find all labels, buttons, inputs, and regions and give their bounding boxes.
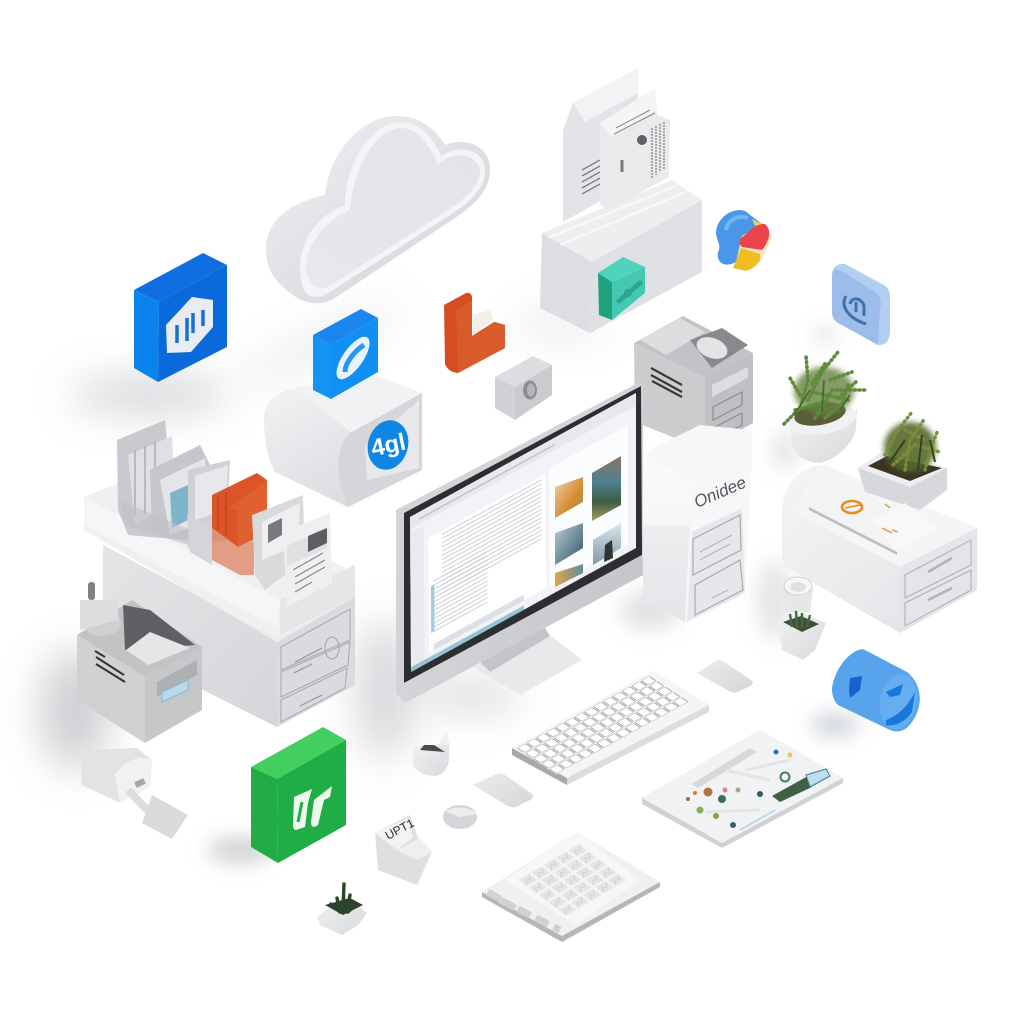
- blue square icon: [134, 253, 227, 382]
- orange folders: [212, 473, 267, 575]
- papers on right cabinet: [809, 485, 937, 555]
- documents on white box: [540, 68, 702, 333]
- box base: [540, 180, 702, 333]
- tablet: [642, 730, 843, 848]
- small plant and cup: [777, 577, 826, 660]
- back document: [563, 68, 638, 222]
- icon: orange bracket: [444, 293, 505, 373]
- monitor: [396, 383, 643, 703]
- keyboard: [512, 671, 709, 785]
- desk mouse round: [443, 805, 477, 829]
- monitor stand: [473, 628, 582, 695]
- blue roll icon: [832, 649, 920, 731]
- plant in white pot, top: [784, 352, 866, 463]
- small white cup: [413, 731, 450, 776]
- white box with blue badge: [264, 372, 422, 507]
- soft ground shadows: [40, 291, 860, 862]
- icon: colourful ring: [716, 210, 772, 271]
- printer left: [77, 582, 202, 743]
- teal icon on box: [598, 257, 645, 320]
- front pages: [252, 495, 332, 607]
- icon: light blue tile: [832, 264, 890, 345]
- printer top right: [634, 316, 753, 450]
- card: [142, 795, 188, 839]
- gray documents: [117, 420, 230, 565]
- icon: gray block: [495, 356, 552, 420]
- tower with label: [643, 425, 752, 622]
- pen holder: [375, 815, 432, 885]
- glass desk cabinet: [84, 470, 355, 727]
- small blue icon: [313, 309, 378, 399]
- tower label: Onidee: [691, 473, 749, 512]
- small succulent: [317, 884, 367, 935]
- file folders on desk: [117, 420, 332, 607]
- right cabinet: [782, 465, 977, 633]
- badge logo: [362, 416, 414, 474]
- cloud icon: [266, 116, 490, 303]
- pen holder: UPT1: [383, 816, 417, 843]
- screen photos: [555, 456, 621, 587]
- front document: [600, 88, 670, 210]
- small device with card: [80, 748, 188, 839]
- badge logo: 4gl: [369, 429, 408, 462]
- mouse pads: [473, 660, 753, 807]
- screen: [410, 393, 637, 672]
- plant in square pot: [858, 412, 947, 510]
- paper stack: [482, 832, 660, 942]
- green square icon: [251, 727, 346, 863]
